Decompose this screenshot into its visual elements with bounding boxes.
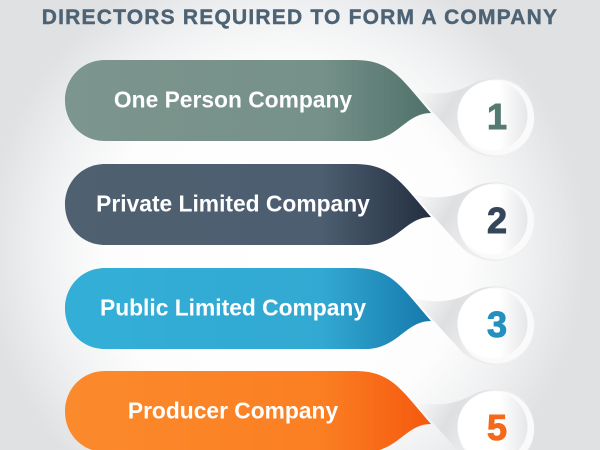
pill: One Person Company xyxy=(65,60,431,141)
label: Private Limited Company: Private Limited Company xyxy=(96,190,370,216)
title: DIRECTORS REQUIRED TO FORM A COMPANY xyxy=(42,6,558,29)
number badge 3 xyxy=(413,286,534,365)
number badge 5: 5 xyxy=(487,407,507,448)
row: Producer Company xyxy=(65,371,534,450)
number badge 1 xyxy=(413,78,534,157)
pill: Private Limited Company xyxy=(65,164,431,245)
number badge 5 xyxy=(413,389,534,450)
label: One Person Company: One Person Company xyxy=(114,86,352,112)
number badge 2 xyxy=(413,182,534,261)
row: Public Limited Company xyxy=(65,268,534,365)
pill: Public Limited Company xyxy=(65,268,431,349)
row: One Person Company xyxy=(65,60,534,157)
label: Producer Company: Producer Company xyxy=(128,398,338,424)
label: Public Limited Company: Public Limited Company xyxy=(100,294,366,320)
pill: Producer Company xyxy=(65,371,431,450)
number badge 3: 3 xyxy=(487,304,507,345)
number badge 2: 2 xyxy=(487,200,507,241)
row: Private Limited Company xyxy=(65,164,534,261)
number badge 1: 1 xyxy=(487,96,507,137)
